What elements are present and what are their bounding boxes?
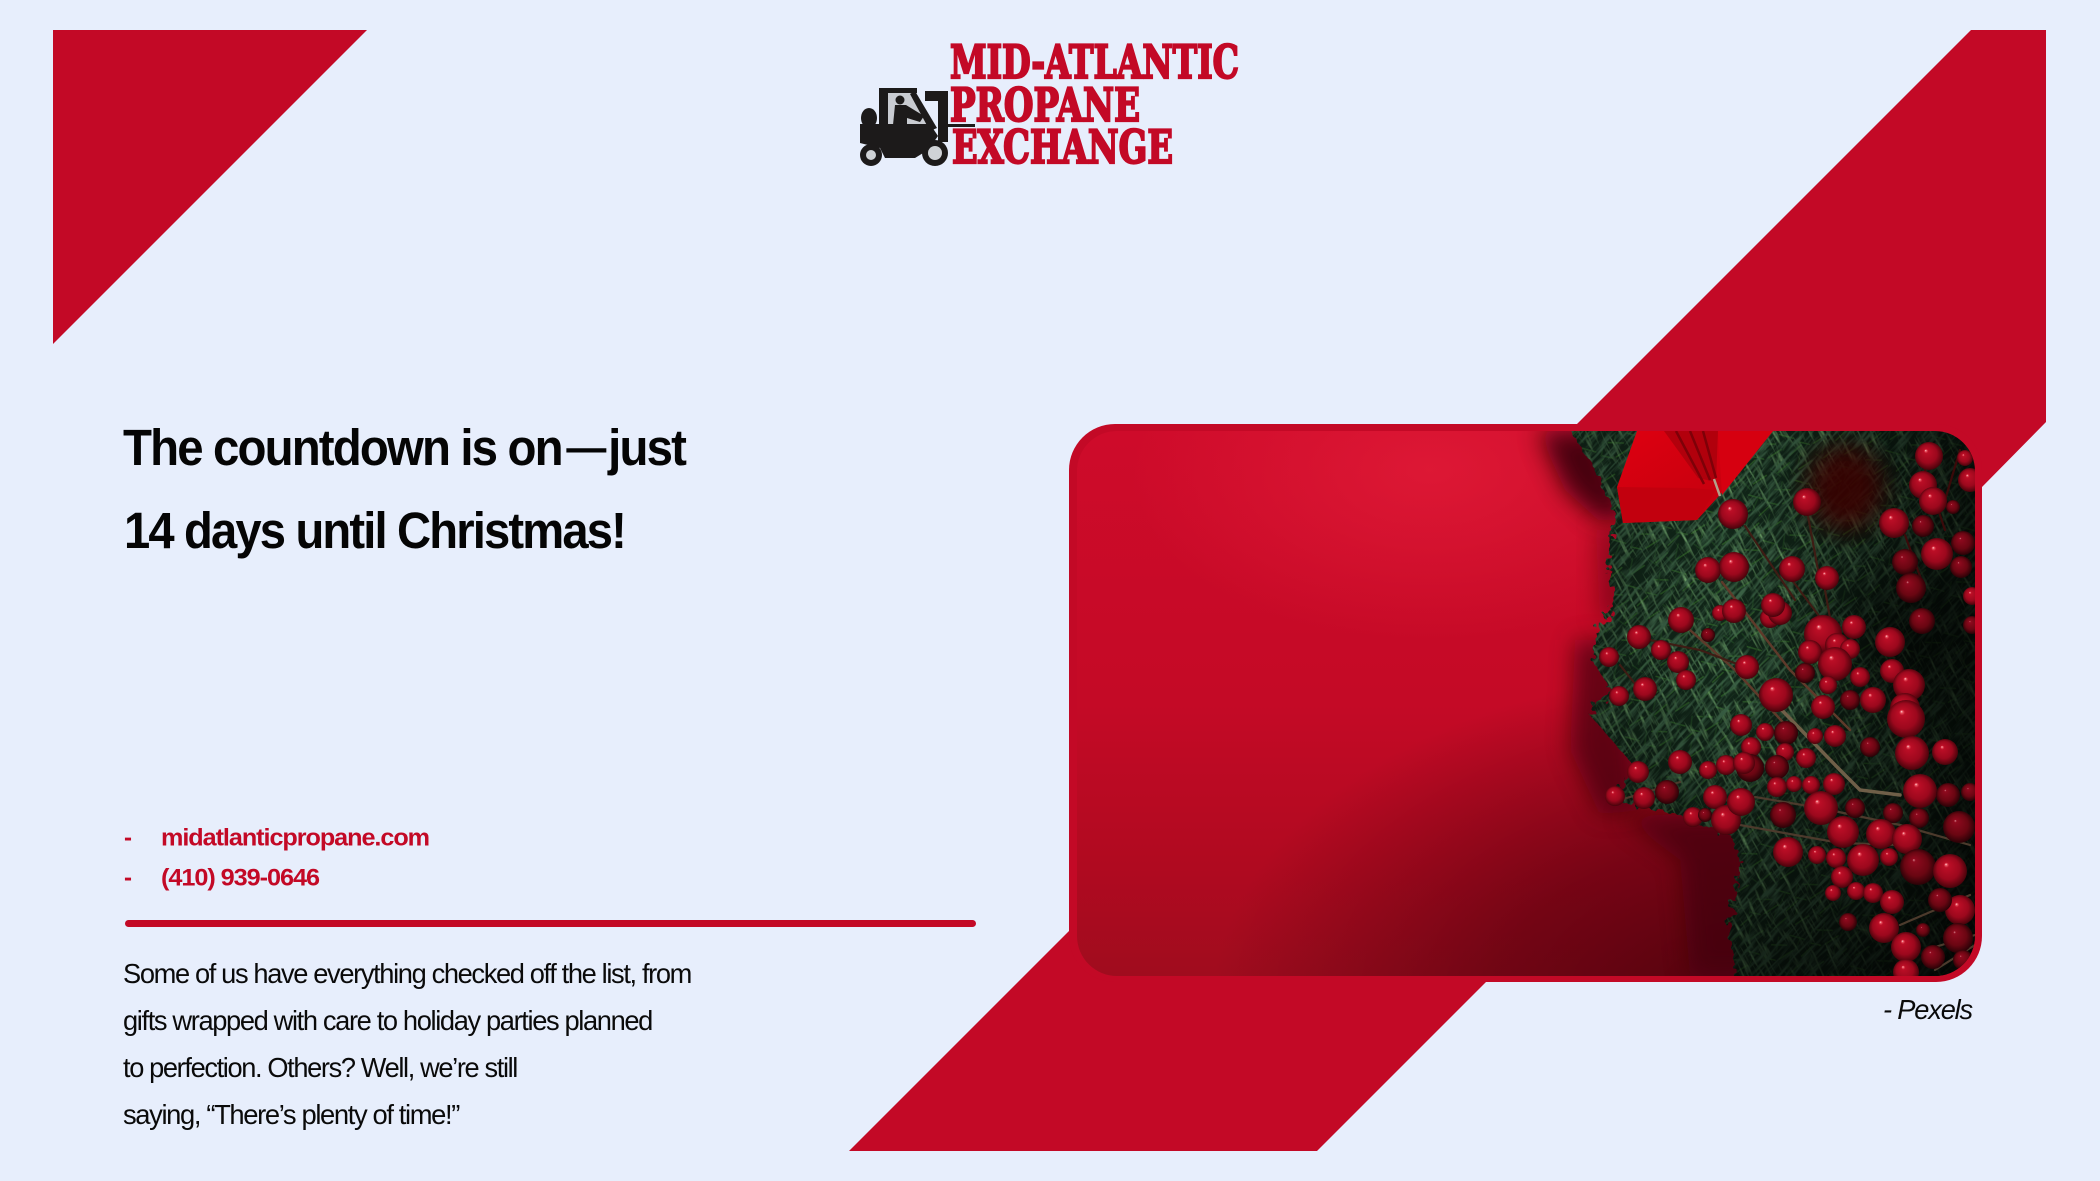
red velvet bow: [1617, 431, 1773, 523]
heading: just: [607, 419, 687, 476]
body paragraph: saying, “There’s plenty of time!”: [123, 1099, 460, 1130]
contact list: -: [124, 864, 132, 892]
contact list: -: [124, 824, 132, 852]
photo frame: [1069, 424, 1982, 982]
body paragraph: gifts wrapped with care to holiday parties planned: [123, 1005, 652, 1036]
heading: The countdown is on: [123, 419, 595, 476]
logo wordmark: EXCHANGE: [952, 120, 1173, 174]
logo icon: forklift: [860, 88, 975, 166]
corner triangle: top left: [53, 30, 367, 344]
photo credit: - Pexels: [1883, 994, 1973, 1025]
logo wordmark: MID-ATLANTIC: [950, 35, 1239, 89]
diagonal band: bottom centre: [849, 900, 1486, 1151]
berries: [1599, 442, 1982, 985]
contact list: midatlanticpropane.com: [161, 824, 429, 852]
logo: Mid-Atlantic Propane Exchange: [860, 35, 1239, 174]
heading: —: [566, 424, 606, 472]
body paragraph: to perfection. Others? Well, we’re still: [123, 1052, 517, 1083]
photo backdrop: red paper: [1077, 431, 1975, 976]
logo wordmark: PROPANE: [950, 78, 1140, 132]
heading: [123, 419, 687, 559]
wreath: pine needles: [1571, 431, 1975, 976]
divider rule: [125, 920, 976, 927]
body paragraph: [123, 958, 691, 1130]
diagonal band: top right: [1400, 30, 2046, 600]
logo wordmark: [950, 35, 1239, 174]
contact list: (410) 939-0646: [161, 864, 320, 892]
contact list: [124, 824, 429, 892]
photo: red paper with pine wreath and berries: [1077, 431, 1975, 976]
heading: 14 days until Christmas!: [124, 502, 625, 559]
berry stems: [1620, 450, 1975, 970]
body paragraph: Some of us have everything checked off the list, from: [123, 958, 691, 989]
